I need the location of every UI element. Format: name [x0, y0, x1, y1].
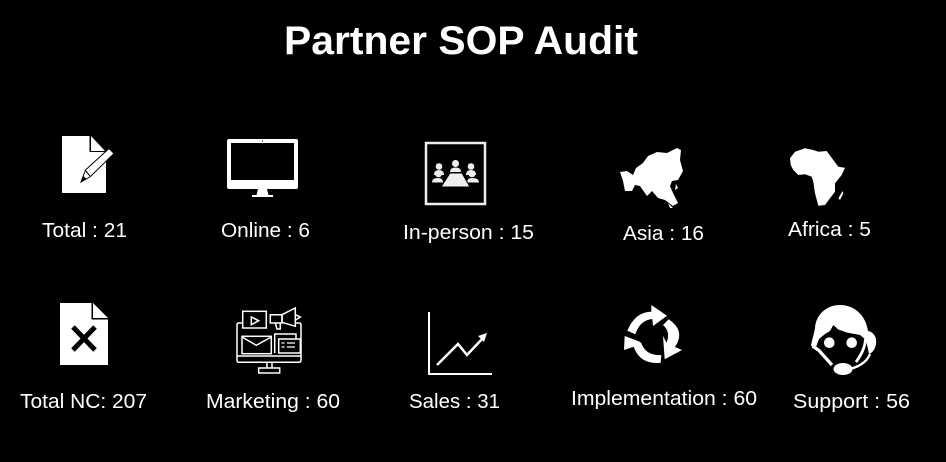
stat: Support [793, 305, 910, 413]
stat: Total [42, 136, 127, 242]
icon: circular arrows [624, 305, 682, 363]
icon: support agent headset [811, 305, 876, 375]
icon: meeting room [426, 143, 485, 204]
label: Support: Support : 56 [793, 391, 910, 413]
label: Asia: Asia : 16 [623, 223, 704, 245]
stat: Sales [409, 312, 500, 413]
stat: Online [221, 139, 310, 242]
stat: Africa [788, 148, 871, 241]
icon: line chart [429, 312, 492, 374]
label: In-person: In-person : 15 [403, 222, 534, 244]
icon: desktop monitor [227, 139, 298, 197]
icon: digital marketing monitor [237, 308, 301, 373]
label: Africa: Africa : 5 [788, 219, 871, 241]
stat: Implementation [571, 305, 757, 410]
icon: Asia map [620, 148, 683, 208]
label: Marketing: Marketing : 60 [206, 391, 340, 413]
icon: document with cross [60, 303, 108, 365]
label: Total: Total : 21 [42, 220, 127, 242]
label: Total NC: Total NC: 207 [20, 391, 147, 413]
label: Sales: Sales : 31 [409, 391, 500, 413]
title: Partner SOP Audit [284, 19, 638, 63]
stat: Total NC [20, 303, 147, 413]
stat: Asia [620, 148, 704, 245]
label: Implementation: Implementation : 60 [571, 388, 757, 410]
icon: Africa map [790, 148, 845, 206]
label: Online: Online : 6 [221, 220, 310, 242]
icon: document with pencil [62, 136, 114, 193]
stat: Marketing [206, 308, 340, 413]
stat: In-person [403, 143, 534, 244]
